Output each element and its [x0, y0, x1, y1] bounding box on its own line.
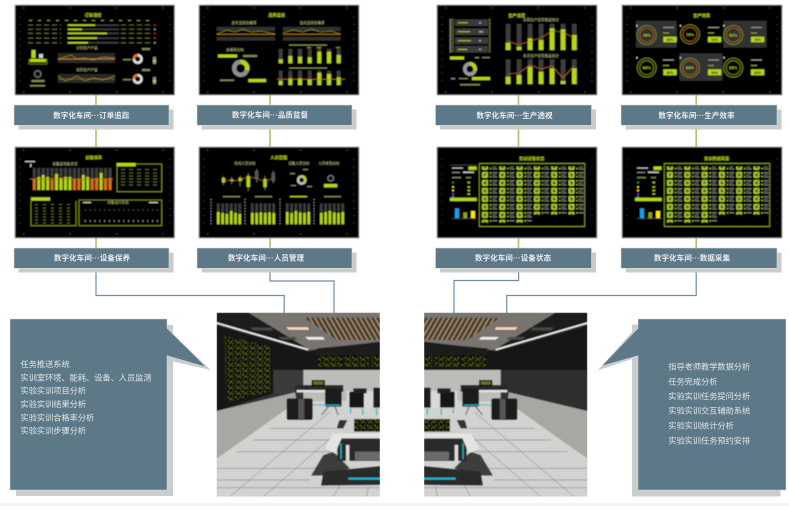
- panel: order tracking dashboard: 订单进程: [85, 12, 102, 18]
- callout: left feature list: 实验实训合格率分析: [20, 412, 94, 422]
- callout: right feature list: 实验实训任务预约安排: [668, 435, 750, 445]
- title bar: equipment status: 数字化车间···设备状态: [475, 254, 552, 262]
- panel: production efficiency dashboard: 70%: [754, 38, 761, 42]
- callout: right feature list: 实验实训统计分析: [668, 421, 734, 431]
- panel: equipment maintenance dashboard: 设备运行状态: [107, 200, 129, 204]
- panel: quality monitoring dashboard: [199, 5, 359, 95]
- callout: left feature list: 任务推送系统: [20, 359, 70, 369]
- panel: production overview dashboard: 本周生产任务数量统计: [523, 17, 559, 22]
- panel: production efficiency dashboard: 生产效率: [693, 12, 710, 19]
- callout: right feature list: 实验实训任务提问分析: [668, 391, 750, 401]
- callout: left feature list: 实验实训结果分析: [20, 399, 86, 409]
- title bar: quality monitoring: [197, 105, 356, 130]
- panel: production overview dashboard: 本月生产任务数量统计: [523, 53, 559, 58]
- panel: production efficiency dashboard: 80%: [667, 71, 673, 75]
- callout: left feature list: [10, 319, 211, 496]
- title bar: production overview: [436, 105, 596, 130]
- title bar: equipment status: [436, 248, 596, 272]
- title bar: quality monitoring: 数字化车间···品质监督: [232, 110, 309, 120]
- panel: data collection dashboard: 实训数据采集: [704, 155, 730, 162]
- image: training room, right view: [424, 313, 587, 497]
- panel: production efficiency dashboard: 81%: [729, 32, 738, 38]
- panel: production efficiency dashboard: 80%: [667, 38, 673, 42]
- panel: quality monitoring dashboard: 当月品质合格率: [299, 20, 325, 25]
- title bar: production efficiency: 数字化车间···生产效率: [658, 111, 735, 120]
- title bar: data collection: 数字化车间···数据采集: [654, 254, 731, 262]
- panel: staff management dashboard: 人员管理: [270, 154, 288, 161]
- panel: staff management dashboard: 设备人员分析: [288, 160, 310, 166]
- callout: right feature list: [598, 319, 786, 496]
- title bar: production overview: 数字化车间···生产透视: [476, 111, 553, 120]
- callout: right feature list: 实验实训交互辅助系统: [668, 406, 750, 416]
- title bar: staff management: 数字化车间···人员管理: [228, 254, 305, 262]
- panel: equipment maintenance dashboard: 设备保养: [85, 154, 103, 161]
- image: training room, left view: [217, 313, 380, 497]
- panel: data collection dashboard: [622, 147, 782, 238]
- panel: equipment maintenance dashboard: 设备量性能总览: [52, 161, 78, 166]
- panel: order tracking dashboard: [15, 5, 174, 95]
- panel: staff management dashboard: [199, 147, 359, 238]
- panel: production efficiency dashboard: 80%: [754, 71, 761, 75]
- panel: production efficiency dashboard: 90%: [711, 71, 718, 75]
- panel: equipment status dashboard: 实训设备状态: [519, 155, 545, 162]
- callout: left feature list: 实验实训项目分析: [20, 386, 86, 396]
- panel: production overview dashboard: 生产进度: [508, 12, 526, 19]
- connector lines: lime links between panels and title bars: [95, 95, 697, 248]
- title bar: order tracking: 数字化车间···订单追踪: [53, 111, 130, 120]
- panel: staff management dashboard: 人员考勤分析: [318, 160, 340, 166]
- panel: production overview dashboard: [437, 5, 597, 95]
- connector lines: blue links from title bars to room images: [96, 268, 696, 313]
- panel: production efficiency dashboard: 83%: [686, 65, 694, 70]
- title bar: equipment maintenance: 数字化车间···设备保养: [54, 254, 131, 262]
- panel: production efficiency dashboard: 78%: [643, 32, 651, 38]
- callout: right feature list: 任务完成分析: [668, 376, 717, 386]
- panel: equipment maintenance dashboard: [15, 147, 174, 238]
- title bar: production efficiency: [621, 105, 782, 130]
- title bar: data collection: [621, 248, 782, 272]
- callout: right feature list: 指导老师教学数据分析: [668, 362, 750, 372]
- panel: quality monitoring dashboard: 全年品质合格率: [231, 20, 257, 25]
- panel: production efficiency dashboard: 79%: [686, 32, 694, 37]
- panel: production efficiency dashboard: 68%: [643, 65, 651, 70]
- callout: left feature list: 实训室环境、能耗、设备、人员监测: [20, 372, 152, 382]
- callout: left feature list: 实验实训步骤分析: [20, 426, 86, 436]
- page base strip: [0, 503, 789, 506]
- panel: quality monitoring dashboard: 合格率分析: [226, 47, 244, 52]
- panel: order tracking dashboard: 计划生产产量: [76, 45, 98, 50]
- title bar: staff management: [197, 248, 356, 272]
- title bar: order tracking: [14, 105, 174, 130]
- panel: production efficiency dashboard: 85%: [729, 65, 738, 70]
- panel: production efficiency dashboard: 90%: [711, 38, 718, 42]
- panel: quality monitoring dashboard: 品质监督: [268, 12, 285, 18]
- panel: equipment status dashboard: [437, 147, 597, 238]
- panel: staff management dashboard: 车间人员分析: [234, 160, 256, 166]
- panel: order tracking dashboard: 实际生产产量: [76, 67, 98, 72]
- title bar: equipment maintenance: [14, 248, 174, 272]
- panel: production efficiency dashboard: [622, 5, 782, 95]
